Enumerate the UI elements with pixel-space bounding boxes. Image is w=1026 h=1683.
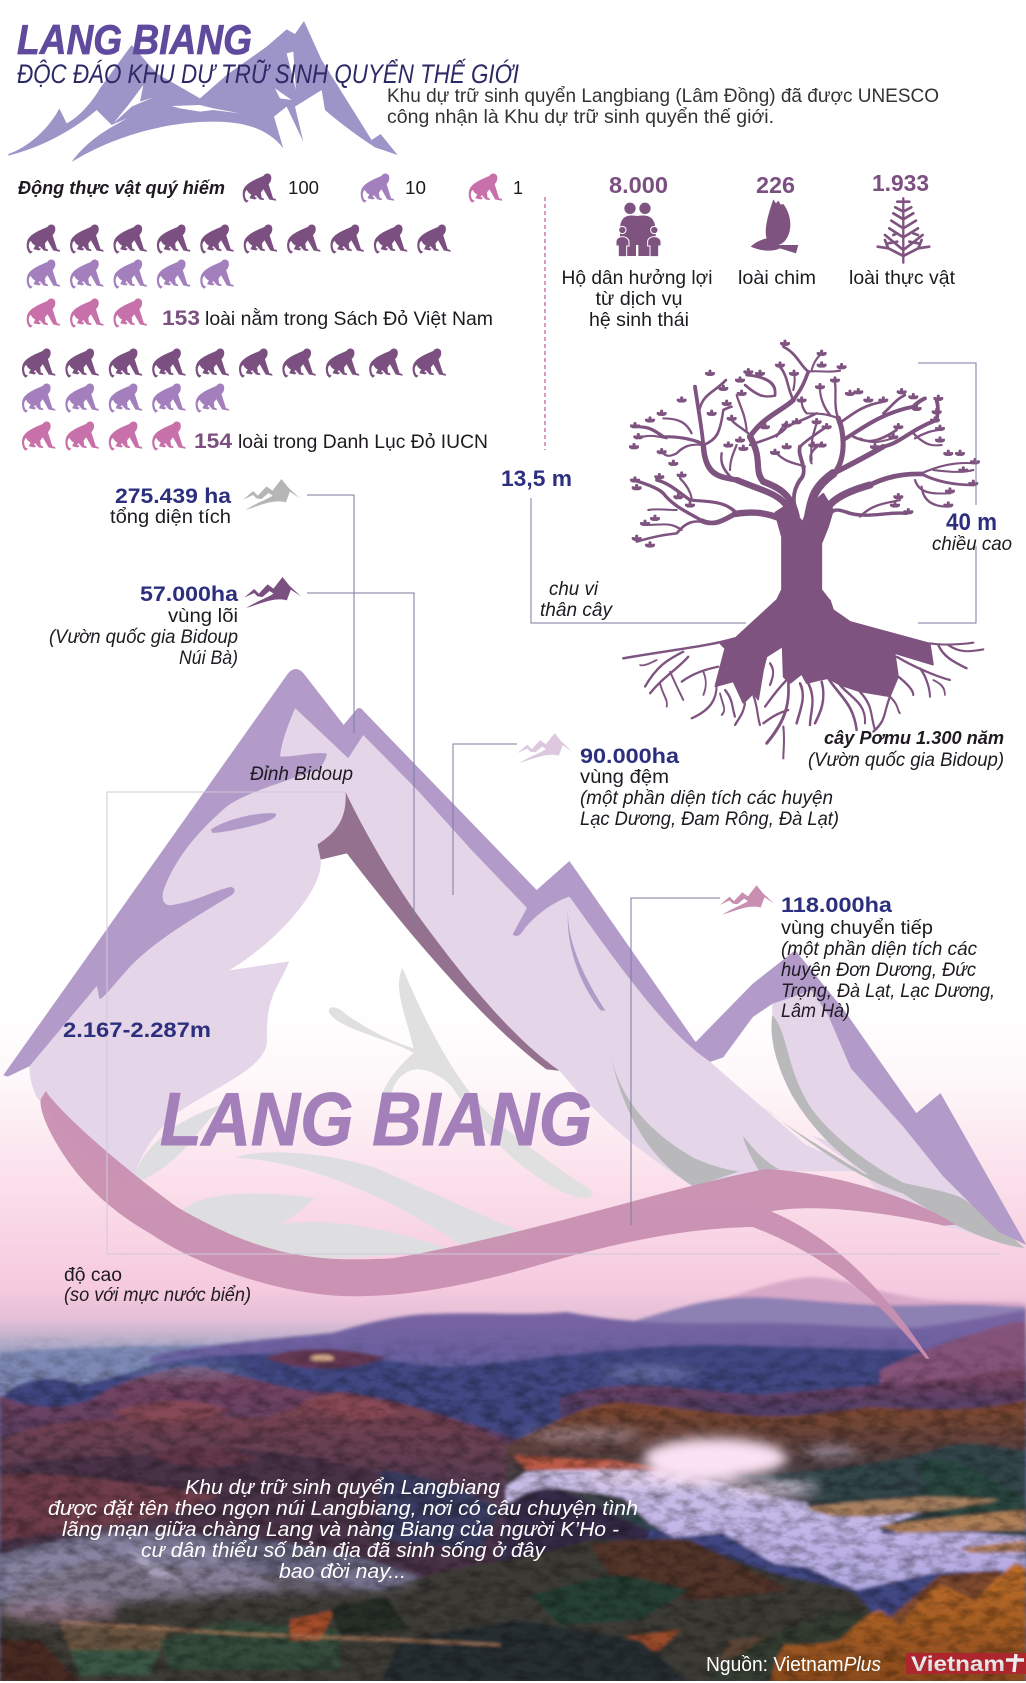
measure: trunk girth: thân cây [540, 600, 614, 621]
callout: transition zone: vùng chuyển tiếp [781, 917, 933, 939]
tree: 1300-year old Pomu [623, 340, 1004, 771]
intro text [387, 85, 939, 128]
grey ridge shadows [329, 968, 592, 1198]
icon: pale mountain [518, 733, 572, 763]
stat: households: 8.000 [609, 172, 668, 198]
legend: rare species: Động thực vật quý hiếm [18, 178, 225, 198]
icon: grey mountain [243, 479, 300, 510]
callout: transition zone: huyện Đơn Dương, Đức [781, 960, 976, 981]
callout: core zone [49, 577, 414, 925]
monkeys: IUCN Red List [22, 348, 488, 453]
logo: Vietnam+: Vietnam [911, 1653, 1005, 1676]
callout: core zone: (Vườn quốc gia Bidoup [49, 627, 238, 648]
icon: monkey 100 [243, 173, 276, 203]
measure: tree height [918, 363, 1012, 623]
altitude marker [63, 792, 1001, 1306]
story text over photo [48, 1476, 638, 1583]
source: Nguồn: VietnamPlus [706, 1654, 881, 1676]
legend: rare species: 1 [513, 178, 523, 198]
big mountain name: LANG BIANG [160, 1077, 592, 1161]
light interior slopes [29, 708, 1026, 1247]
dark streak [317, 792, 560, 1071]
monkeys: Red Book Vietnam: 153 [162, 307, 200, 330]
callout: transition zone: 118.000ha [781, 894, 892, 917]
intro text: công nhận là Khu dự trữ sinh quyển thế giới. [387, 106, 774, 128]
dark purple slopes [3, 669, 1026, 1245]
story text over photo: cư dân thiểu số bản địa đã sinh sống ở đây [141, 1539, 547, 1562]
measure: trunk girth: chu vi [549, 579, 599, 600]
tree caption: cây Pơmu 1.300 năm [824, 727, 1004, 748]
title: LANG BIANG [17, 16, 252, 63]
monkeys: Red Book Vietnam: loài nằm trong Sách Đỏ Việt Nam [205, 307, 493, 330]
stat: households: Hộ dân hưởng lợi [562, 267, 712, 289]
callout: core zone: vùng lõi [168, 605, 238, 627]
stat: birds [738, 172, 816, 289]
callout: transition zone: Trọng, Đà Lạt, Lạc Dương, [781, 981, 995, 1002]
icon: mauve mountain [244, 577, 301, 608]
subtitle: ĐỘC ĐÁO KHU DỰ TRỮ SINH QUYỂN THẾ GIỚI [17, 58, 519, 89]
callout: total area [110, 479, 354, 733]
story text over photo: được đặt tên theo ngọn núi Langbiang, nơi có câu chuyện tình [48, 1497, 638, 1520]
story text over photo: lãng mạn giữa chàng Lang và nàng Biang của người K’Ho - [62, 1518, 619, 1541]
tree roots [623, 600, 983, 758]
callout: total area: 275.439 ha [115, 485, 231, 508]
monkeys: IUCN Red List: 154 [194, 430, 232, 453]
label: peak: Đỉnh Bidoup [250, 764, 353, 785]
story text over photo: bao đời nay... [279, 1560, 406, 1583]
altitude marker: độ cao [64, 1265, 122, 1286]
icon: family [616, 203, 661, 257]
callout: total area: tổng diện tích [110, 506, 231, 528]
photo: mountain and lake landscape [0, 1277, 1026, 1683]
monkeys: Red Book Vietnam [27, 224, 493, 330]
legend: rare species: 10 [405, 178, 426, 198]
stat: plants [849, 170, 956, 289]
intro text: Khu dự trữ sinh quyển Langbiang (Lâm Đồng) đã được UNESCO [387, 85, 939, 107]
icon: plant [878, 198, 929, 263]
pink ribbon [40, 1091, 956, 1359]
story text over photo: Khu dự trữ sinh quyển Langbiang [185, 1476, 501, 1499]
stat: birds: 226 [756, 172, 795, 198]
photo: cloud over lake [643, 1438, 787, 1482]
icon: monkey 1 [469, 173, 502, 203]
icon: pink mountain [720, 885, 774, 915]
logo: Vietnam+ [906, 1653, 1026, 1676]
callout: core zone: 57.000ha [140, 583, 238, 606]
callout: buffer zone: Lạc Dương, Đam Rông, Đà Lạt) [580, 809, 839, 830]
callout: transition zone [631, 885, 995, 1225]
big mountain illustration [3, 669, 1026, 1260]
callout: buffer zone: (một phần diện tích các huyện [580, 788, 833, 809]
measure: tree height: 40 m [946, 509, 997, 536]
legend: rare species [18, 173, 523, 203]
callout: buffer zone: 90.000ha [580, 745, 679, 768]
legend: rare species: 100 [288, 178, 319, 198]
stat: households: từ dịch vụ [596, 288, 682, 310]
stat: households: hệ sinh thái [589, 309, 689, 331]
callout: buffer zone [453, 733, 839, 895]
altitude marker: (so với mực nước biển) [64, 1285, 251, 1306]
measure: trunk girth: 13,5 m [501, 466, 572, 491]
callout: transition zone: Lâm Hà) [781, 1001, 850, 1022]
callout: transition zone: (một phần diện tích các [781, 939, 977, 960]
measure: trunk girth [501, 466, 746, 623]
callout: buffer zone: vùng đệm [580, 766, 669, 788]
stat: households [562, 172, 712, 331]
icon: monkey 10 [361, 173, 394, 203]
icon: bird [751, 199, 798, 253]
callout: core zone: Núi Bà) [179, 648, 238, 669]
stat: birds: loài chim [738, 267, 816, 289]
altitude marker: 2.167-2.287m [63, 1019, 211, 1042]
stat: plants: 1.933 [872, 170, 929, 196]
monkeys: IUCN Red List: loài trong Danh Lục Đỏ IUCN [238, 431, 488, 453]
tree: 1300-year old Pomu: (Vườn quốc gia Bidoup) [808, 750, 1004, 771]
header mountain [8, 21, 398, 162]
strip at bottom edge [0, 1681, 1026, 1683]
measure: tree height: chiều cao [932, 534, 1012, 555]
stat: plants: loài thực vật [849, 267, 956, 289]
